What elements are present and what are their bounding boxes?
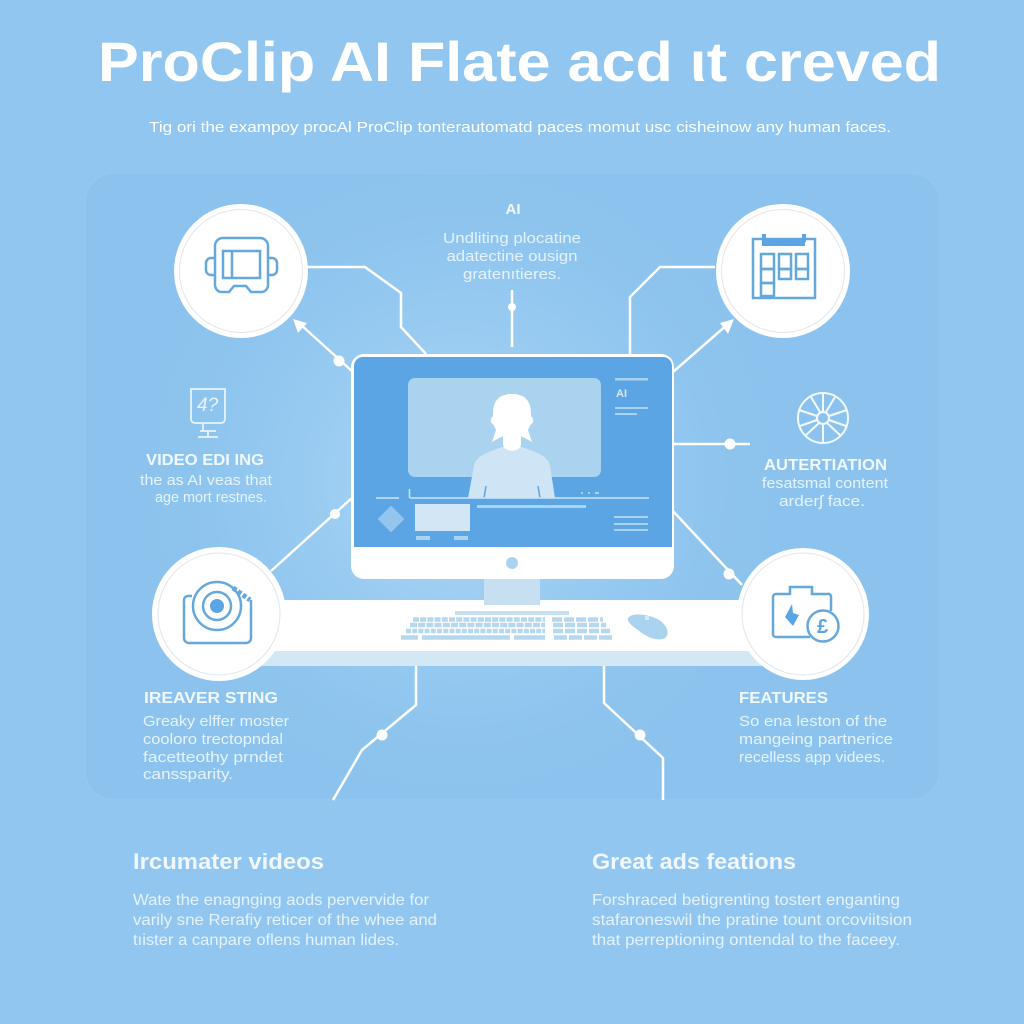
text block: authentication: AUTERTIATION [764,457,887,474]
person silhouette [468,394,555,498]
timeline [376,489,649,498]
video preview [408,378,601,477]
screen label: AI [616,388,627,400]
monitor stand [484,579,540,605]
text block: reaver sting [143,690,289,783]
connector lines [271,267,750,800]
icon: monitor with question: 4? [197,395,219,416]
monitor body [351,354,674,579]
text block: features: mangeing partnerice [739,732,893,748]
text block: authentication [762,457,888,510]
text block: features [739,690,893,766]
bottom block: right: stafaroneswil the pratine tount orcoviitsion [592,912,912,929]
panel: main diagram [85,173,940,800]
icon circle: top right [716,204,850,338]
text block: video editing: the as AI veas that [140,473,272,489]
mouse [628,614,668,639]
bottom block: right: that perreptioning ontendal to the faceey. [592,932,900,949]
title: ProClip AI Flate acd ιt creved [98,30,941,93]
text block: AI: gratenıtieres. [463,267,561,283]
bottom block: right: Forshraced betigrenting tostert enganting [592,892,900,909]
text block: features: recelless app videes. [739,750,885,766]
connector nodes and arrowheads [293,303,736,740]
monitor power dot [506,557,518,569]
thumbnail [415,504,470,531]
text block: features: So ena leston of the [739,714,887,730]
desk [262,600,762,666]
icon: calendar [753,234,815,298]
icon: monitor with question [191,389,225,437]
text block: reaver sting: IREAVER STING [144,690,278,707]
icon: camera [184,582,251,643]
diamond play button [379,507,403,531]
text block: reaver sting: cooloro trectopndal [143,732,283,748]
bottom block: right: Great ads feations [592,849,796,874]
icon: briefcase and coin [773,587,838,642]
text block: video editing: VIDEO EDI ING [146,452,264,469]
bottom block: left: varily sne Rerafiy reticer of the whee and [133,912,437,929]
icon circle: bottom left [152,547,286,681]
text block: authentication: fesatsmal content [762,476,888,492]
icon: video headset [206,238,277,292]
bottom block: right [592,849,912,949]
text block: AI: adatectine ousign [446,249,578,265]
icon circle: top left [174,204,308,338]
bottom block: left: Ircumater videos [133,849,324,874]
monitor screen [354,357,672,547]
text block: AI [443,201,581,283]
text block: video editing [140,452,272,506]
text block: reaver sting: canssparity. [143,767,233,783]
text block: reaver sting: Greaky elffer moster [143,714,289,730]
keyboard [401,611,614,638]
monitor [351,354,674,605]
bottom block: left: tıister a canpare oflens human lides. [133,932,399,949]
text block: reaver sting: facetteothy prndet [143,750,283,766]
bottom block: left [133,849,437,949]
text block: video editing: age mort restnes. [155,490,267,506]
subtitle: Tig ori the exampoy procAl ProClip tonterautomatd paces momut usc cisheinow any human faces. [149,119,891,136]
text block: features: FEATURES [739,690,828,707]
icon: wheel [798,393,848,443]
text block: AI: Undliting plocatine [443,231,581,247]
icon circle: bottom right [737,548,869,680]
sidebar lines [416,378,648,540]
text block: AI: AI [506,201,520,218]
text block: authentication: arderʃ face. [779,494,865,510]
bottom block: left: Wate the enagnging aods pervervide for [133,892,430,909]
icon circle: bottom right: £ [817,616,828,638]
